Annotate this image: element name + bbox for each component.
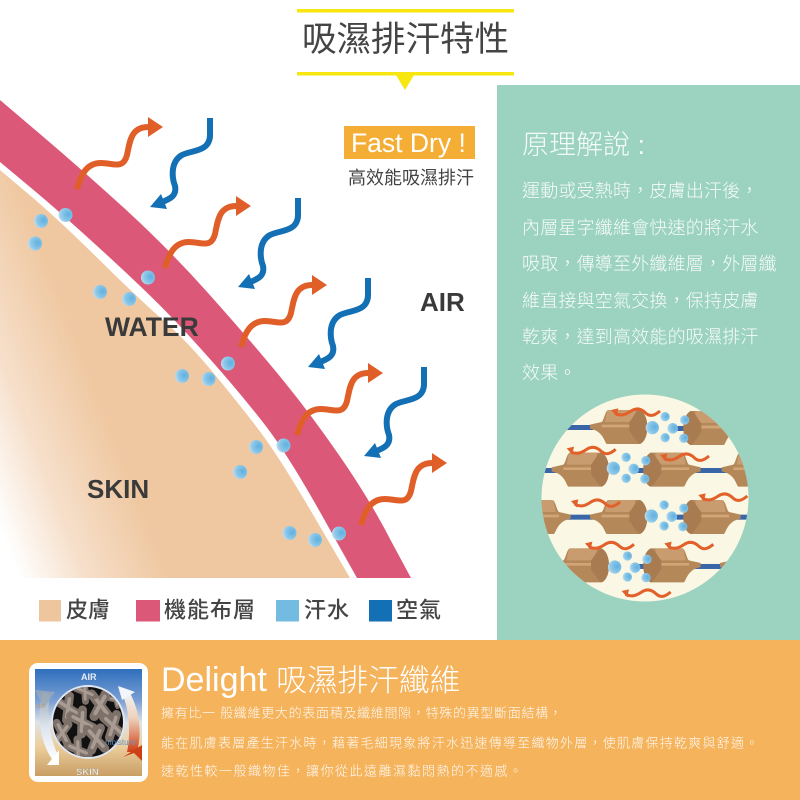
image: fiber thumbnail: moisture — [105, 738, 136, 747]
legend: 汗水 — [304, 598, 350, 622]
label: skin: SKIN — [87, 474, 149, 504]
label: water: WATER — [105, 312, 199, 342]
legend — [39, 598, 442, 622]
text block: delight fiber description: 擁有比一 般纖維更大的表面積及纖維間隙，特殊的異型斷面結構， — [161, 706, 563, 720]
text block: principle explanation: 乾爽，達到高效能的吸濕排汗 — [522, 327, 759, 347]
legend: 皮膚 — [66, 598, 110, 622]
illustration: fiber cross section circle — [542, 394, 748, 602]
panel: delight fiber — [0, 640, 800, 800]
image: fiber thumbnail: SKIN — [76, 767, 99, 778]
icon: sweat drops — [28, 208, 346, 547]
functional fabric layer — [0, 100, 411, 578]
title: 吸濕排汗特性 — [302, 21, 509, 59]
heading: principle: 原理解說 : — [522, 130, 645, 160]
arrows: blue air entering — [150, 118, 424, 458]
legend: 機能布層 — [164, 598, 256, 622]
text block: delight fiber description: 速乾性較一般織物佳，讓你從此遠離濕黏悶熱的不適感。 — [161, 764, 524, 778]
text block: principle explanation: 維直接與空氣交換，保持皮膚 — [522, 291, 759, 311]
text block: delight fiber description — [161, 706, 760, 778]
skin layer — [0, 170, 350, 578]
image: fiber thumbnail: AIR — [81, 672, 97, 682]
image: fiber thumbnail: air — [36, 701, 45, 710]
title — [297, 9, 514, 90]
image: fiber thumbnail — [29, 663, 148, 782]
callout: fast dry: 高效能吸濕排汗 — [348, 168, 474, 188]
text block: delight fiber description: 能在肌膚表層產生汗水時，藉著毛細現象將汗水迅速傳導至織物外層，使肌膚保持乾爽與舒適。 — [161, 736, 760, 750]
label: air: AIR — [420, 287, 465, 317]
text block: principle explanation: 吸取，傳導至外纖維層，外層纖 — [522, 254, 777, 274]
text block: principle explanation: 運動或受熱時，皮膚出汗後， — [522, 181, 759, 201]
text block: principle explanation — [522, 181, 777, 383]
text block: principle explanation: 效果。 — [522, 363, 577, 383]
text block: principle explanation: 內層星字纖維會快速的將汗水 — [522, 218, 759, 238]
heading: delight fiber: Delight 吸濕排汗纖維 — [161, 661, 460, 699]
callout: fast dry — [344, 126, 475, 188]
callout: fast dry: Fast Dry ! — [351, 128, 466, 158]
arrows: orange heat rising — [77, 117, 447, 525]
panel: principle explanation — [497, 85, 800, 640]
legend: 空氣 — [396, 598, 442, 622]
